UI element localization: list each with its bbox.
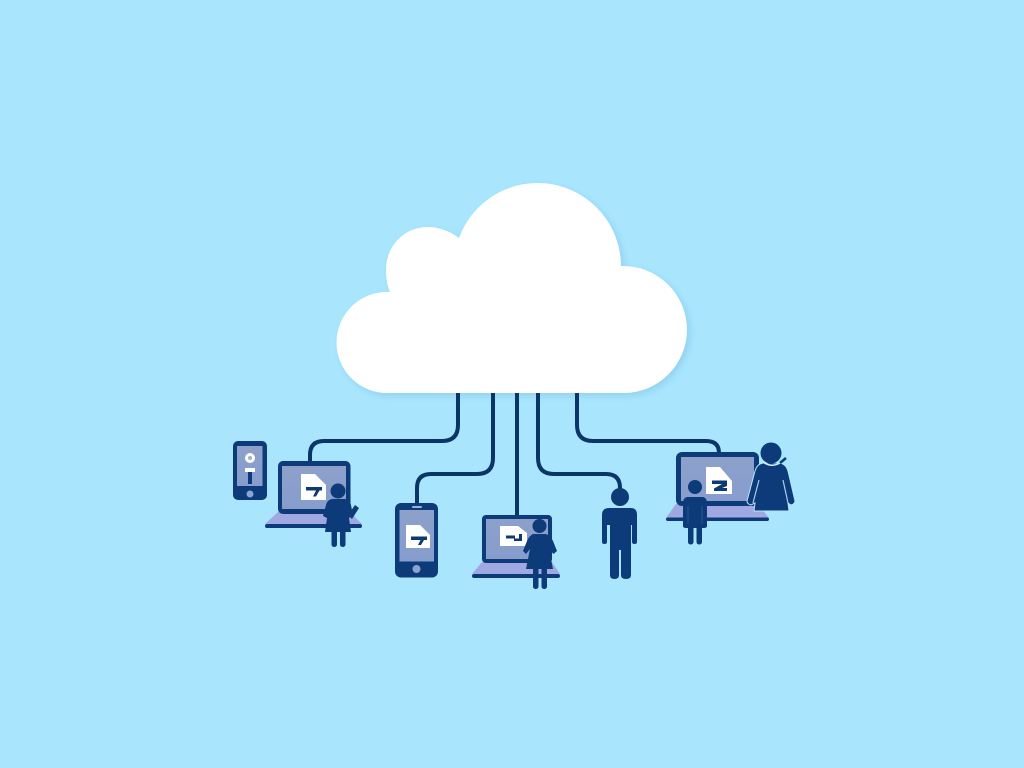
laptop left xyxy=(265,461,362,528)
small phone xyxy=(233,441,267,500)
laptop centre xyxy=(472,515,560,578)
phone centre xyxy=(395,503,438,578)
child at right laptop xyxy=(683,480,707,544)
man standing xyxy=(602,488,637,579)
laptop right xyxy=(666,452,769,521)
connector lines xyxy=(310,393,719,516)
person at centre laptop xyxy=(523,519,557,589)
woman standing right xyxy=(747,442,795,511)
cloud xyxy=(336,183,687,393)
person at left laptop xyxy=(323,484,359,547)
